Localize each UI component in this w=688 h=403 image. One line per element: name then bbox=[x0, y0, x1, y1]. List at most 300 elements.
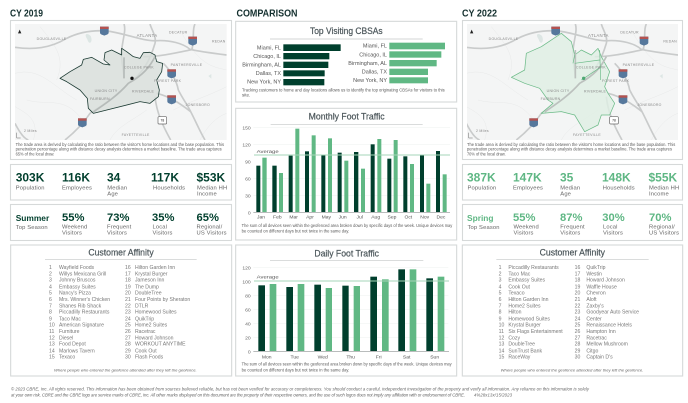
note: 2022 trade area: 70% of the local draw. bbox=[467, 151, 506, 156]
bar chart: CBSAs 2022: Miami, FL bbox=[363, 44, 387, 50]
list: affinity 1 to 30: 4 bbox=[49, 284, 52, 290]
list: affinity 1 to 30: 7 bbox=[49, 303, 52, 309]
bar chart: monthly: 90 bbox=[245, 160, 251, 166]
bar chart: daily: Average bbox=[257, 274, 279, 280]
list: affinity 1 to 30: Racetrac bbox=[586, 335, 607, 341]
panel: 2019 demographics bbox=[10, 164, 232, 200]
stat: regional visitors 65% bbox=[196, 212, 227, 236]
stat: regional visitors 70% bbox=[649, 212, 679, 236]
bar chart: CBSAs 2022: Chicago, IL bbox=[359, 52, 387, 58]
note: affinity 2019: Where people who entered the geofence attended after they left the geofence. bbox=[54, 368, 197, 373]
list: affinity 1 to 30: Nancy's Pizza bbox=[59, 291, 91, 297]
stat: median age 35 bbox=[560, 171, 580, 198]
list: affinity 1 to 30: Chevron bbox=[586, 291, 606, 297]
stat: 116K employees bbox=[62, 171, 92, 192]
panel: 2022 trade area map bbox=[462, 20, 682, 160]
map: 2022 trade area: FAIRBURN bbox=[541, 97, 561, 101]
bar chart: daily: Fri bbox=[376, 354, 382, 360]
list: affinity 1 to 30: 24 bbox=[575, 316, 581, 322]
stat: regional visitors 70%: Regional/ bbox=[649, 224, 675, 230]
list: affinity 1 to 30: Marlows Tavern bbox=[59, 348, 95, 354]
map: 2019 trade area: ATLANTA bbox=[137, 33, 157, 38]
list: affinity 1 to 30: Aloft bbox=[586, 297, 597, 303]
list: affinity 1 to 30: 21 bbox=[125, 297, 131, 303]
panel: 2022 customer affinity bbox=[462, 245, 683, 376]
list: affinity 1 to 30: 20 bbox=[125, 291, 131, 297]
list: affinity 1 to 30: Food Depot bbox=[59, 342, 86, 348]
list: affinity 1 to 30: 17 bbox=[575, 271, 581, 277]
list: affinity 1 to 30: 22 bbox=[125, 303, 131, 309]
note: 2022 trade area: The trade area is derived by calculating the ratio between the visitor's home locations and the base population. This bbox=[467, 142, 675, 147]
bar chart: monthly bbox=[242, 125, 450, 221]
footer: legal disclaimer: at your own risk. CBRE and the CBRE logo are service marks of CBRE, Inc. All other marks displayed on this document are the property of their respective owners, and the use of such logos does not imply any affiliation with or endorsement of CBRE. bbox=[11, 393, 465, 398]
map: 2019 trade area: FAIRBURN bbox=[90, 97, 110, 101]
map: 2019 trade area: DECATUR bbox=[169, 30, 188, 34]
stat: frequent visitors 87%: Frequent bbox=[560, 224, 585, 230]
map: 2019 trade area: 2 Miles bbox=[24, 129, 37, 133]
list: affinity 1 to 30: Texaco bbox=[508, 291, 525, 297]
heading: CY 2022: CY 2022 bbox=[462, 8, 497, 20]
list: affinity 1 to 30: Goodyear Auto Service bbox=[586, 310, 639, 316]
list: affinity 1 to 30: 15 bbox=[49, 355, 55, 361]
map: 2019 trade area: UNION CITY bbox=[95, 89, 118, 93]
stat: 117K households bbox=[151, 171, 185, 192]
list: affinity 1 to 30: Howard Johnson bbox=[586, 278, 625, 284]
list: affinity 1 to 30: Citgo bbox=[586, 348, 598, 354]
list: affinity 1 to 30: Mellow Mushroom bbox=[586, 342, 628, 348]
list: affinity 1 to 30: 9 bbox=[499, 316, 502, 322]
stat: 148K households: Households bbox=[603, 186, 635, 192]
list: affinity 1 to 30: Renaissance Hotels bbox=[586, 323, 632, 329]
stat: median age 35: 35 bbox=[560, 171, 574, 185]
map: 2022 trade area: FAYETTEVILLE bbox=[573, 133, 601, 137]
stat: weekend visitors 55%: Visitors bbox=[514, 230, 534, 236]
list: affinity 1 to 30: 12 bbox=[499, 335, 505, 341]
list: affinity 1 to 30: 4 bbox=[499, 284, 502, 290]
bar chart: monthly: 120 bbox=[242, 142, 251, 148]
bar chart: CBSAs 2022: Dallas, TX bbox=[362, 70, 387, 76]
panel: 2022 demographics bbox=[462, 164, 682, 200]
footer: legal disclaimer: 4%28x13x/15/2023 bbox=[474, 393, 513, 398]
stat: regional visitors 65%: 65% bbox=[196, 212, 219, 224]
stat: top season spring: Top Season bbox=[468, 225, 500, 231]
note: monthly: be counted on different days but not twice in the same day. bbox=[242, 229, 349, 234]
note: daily: The sum of all devices seen within the geofenced area broken down by specific days of the week. Unique devices may bbox=[242, 361, 453, 366]
bar chart: daily: 60 bbox=[245, 308, 251, 314]
bar chart: CBSAs 2019: Chicago, IL bbox=[253, 54, 281, 60]
note: monthly bbox=[242, 223, 453, 234]
stat: regional visitors 65%: Regional/ bbox=[196, 224, 223, 230]
stat: $53K income: $53K bbox=[196, 171, 226, 185]
list: affinity 1 to 30: Jameson Inn bbox=[135, 278, 164, 284]
list: affinity 1 to 30: Wayfield Foods bbox=[59, 265, 95, 271]
bar chart: monthly: 0 bbox=[248, 210, 251, 216]
stat: weekend visitors 55%: Visitors bbox=[62, 230, 82, 236]
stat: 303K population: 303K bbox=[16, 171, 45, 185]
map: 2019 trade area bbox=[15, 24, 227, 140]
stat: $53K income: Median HH bbox=[197, 186, 227, 192]
list: affinity 1 to 30: Howard Johnson bbox=[135, 335, 174, 341]
list: affinity 1 to 30: 14 bbox=[499, 348, 505, 354]
list: affinity 1 to 30: 13 bbox=[49, 342, 55, 348]
bar chart: monthly: Mar bbox=[289, 215, 298, 221]
stat: 387K population: 387K bbox=[467, 171, 496, 185]
stat: frequent visitors 73%: 73% bbox=[107, 212, 129, 224]
list: affinity 1 to 30: 2 bbox=[49, 271, 52, 277]
list: affinity 1 to 30: 18 bbox=[125, 278, 131, 284]
map: 2022 trade area: PANTHERSVILLE bbox=[623, 63, 655, 67]
list: affinity 1 to 30: 16 bbox=[125, 265, 131, 271]
list: affinity 1 to 30: 23 bbox=[575, 310, 581, 316]
heading: customer affinity 2022: Customer Affinity bbox=[540, 247, 605, 257]
stat: $55K income: $55K bbox=[648, 171, 678, 185]
note: CBSAs: Tracking customers to home and day locations allows us to identify the top originating CBSAs for visitors to this bbox=[242, 88, 445, 93]
bar chart: CBSAs 2022: New York, NY bbox=[353, 78, 387, 84]
list: affinity 1 to 30: Hilton Garden Inn bbox=[508, 297, 549, 303]
stat: weekend visitors 55%: Weekend bbox=[514, 224, 539, 230]
heading: daily foot traffic: Daily Foot Traffic bbox=[314, 248, 379, 258]
list: affinity 1 to 30: Flash Foods bbox=[135, 355, 164, 361]
list: affinity 1 to 30: 13 bbox=[499, 342, 505, 348]
list: affinity 1 to 30: 6 bbox=[499, 297, 502, 303]
footer: legal disclaimer: © 2023 CBRE, Inc. All rights reserved. This information has been obtained from sources believed reliable, but has not been verified for accuracy or completeness. You should conduct a careful, independent investigation of the property and verify all information. Any reliance on this information is solely bbox=[11, 387, 590, 392]
list: affinity 1 to 30: Four Points by Sheraton bbox=[135, 297, 190, 303]
stat: regional visitors 70%: 70% bbox=[649, 212, 671, 224]
list: affinity 1 to 30: 1 bbox=[49, 265, 52, 271]
note: affinity 2022: Where people who entered the geofence attended after they left the geofence. bbox=[501, 368, 643, 373]
list: affinity 1 to 30: 5 bbox=[499, 291, 502, 297]
panel: monthly foot traffic bbox=[236, 108, 457, 240]
bar chart: monthly: May bbox=[322, 215, 332, 221]
list: affinity 1 to 30: 16 bbox=[575, 265, 581, 271]
bar chart: monthly: 150 bbox=[242, 125, 251, 131]
map: 2019 trade area: JONESBORO bbox=[186, 103, 210, 107]
map: 2019 trade area: FAYETTEVILLE bbox=[122, 133, 150, 137]
note: daily bbox=[242, 361, 453, 372]
list: affinity 1 to 30: 25 bbox=[575, 323, 581, 329]
stat: local visitors 30%: Visitors bbox=[603, 230, 623, 236]
panel: 2019 trade area map bbox=[10, 20, 232, 160]
bar chart: monthly: Jan bbox=[257, 215, 265, 221]
bar chart: daily: Mon bbox=[262, 354, 272, 360]
bar chart: CBSAs 2022 bbox=[348, 43, 445, 84]
list: affinity 1 to 30: 29 bbox=[575, 348, 581, 354]
bar chart: daily: Wed bbox=[318, 354, 328, 360]
stat: $55K income: Income bbox=[649, 192, 669, 198]
stat: 116K employees: 116K bbox=[62, 171, 90, 185]
footer: legal disclaimer bbox=[11, 387, 590, 398]
note: monthly: The sum of all devices seen within the geofenced area broken down by specific days of the week. Unique devices may bbox=[242, 223, 453, 228]
bar chart: daily: Sat bbox=[403, 354, 411, 360]
map: 2022 trade area: RIVERDALE bbox=[584, 90, 607, 94]
list: affinity 1 to 30: 9 bbox=[49, 316, 52, 322]
list: affinity 1 to 30: 29 bbox=[125, 348, 131, 354]
list: affinity 1 to 30: 26 bbox=[575, 329, 581, 335]
note: 2022 trade area: penetration percentage along with distance decay analysis determines a market baseline. The trade area captures bbox=[467, 147, 672, 152]
list: affinity 1 to 30: Captain D's bbox=[586, 355, 613, 361]
list: affinity 1 to 30: 5 bbox=[49, 291, 52, 297]
list: affinity 1 to 30: Shanes Rib Shack bbox=[59, 303, 102, 309]
map: 2019 trade area: REDAN bbox=[212, 40, 226, 44]
bar chart: daily: 100 bbox=[242, 280, 251, 286]
heading: customer affinity 2019: Customer Affinity bbox=[88, 247, 154, 257]
panel: 2019 visitors bbox=[10, 204, 232, 240]
heading: CY 2019: CY 2019 bbox=[10, 8, 43, 20]
bar chart: monthly: 60 bbox=[245, 177, 251, 183]
stat: 147K employees: 147K bbox=[513, 171, 542, 185]
stat: 147K employees: Employees bbox=[513, 186, 543, 192]
bar chart: monthly: Oct bbox=[404, 215, 413, 221]
stat: weekend visitors 55% bbox=[62, 212, 87, 236]
list: affinity 1 to 30: Embassy Suites bbox=[59, 284, 96, 290]
note: 2022 trade area bbox=[467, 142, 675, 156]
bar chart: daily: 0 bbox=[248, 349, 251, 355]
stat: 148K households: 148K bbox=[602, 171, 631, 185]
heading: top visiting CBSAs: Top Visiting CBSAs bbox=[310, 26, 383, 36]
stat: 303K population: Population bbox=[16, 186, 45, 192]
panel: top visiting CBSAs bbox=[236, 21, 457, 102]
list: affinity 1 to 30: 27 bbox=[575, 335, 581, 341]
list: affinity 1 to 30: Krystal Burger bbox=[135, 271, 168, 277]
list: affinity 1 to 30: 19 bbox=[125, 284, 131, 290]
map: 2022 trade area bbox=[466, 24, 678, 140]
list: affinity 1 to 30: Racetrac bbox=[135, 329, 156, 335]
list: affinity 1 to 30: 3 bbox=[499, 278, 502, 284]
stat: top season summer: Top Season bbox=[16, 225, 48, 231]
bar chart: monthly: Jun bbox=[339, 215, 347, 221]
list: affinity 1 to 30: 30 bbox=[125, 355, 131, 361]
map: 2022 trade area: UNION CITY bbox=[547, 89, 570, 93]
stat: top season summer: Summer bbox=[16, 213, 50, 223]
bar chart: CBSAs 2019: Dallas, TX bbox=[256, 71, 281, 77]
list: affinity 1 to 30 bbox=[499, 265, 639, 361]
stat: local visitors 35% bbox=[152, 212, 174, 236]
list: affinity 1 to 30: SunTrust Bank bbox=[508, 348, 542, 354]
bar chart: daily: Sun bbox=[430, 354, 439, 360]
list: affinity 1 to 30: 27 bbox=[125, 335, 131, 341]
stat: 387K population: Population bbox=[468, 186, 496, 192]
list: affinity 1 to 30: 14 bbox=[49, 348, 55, 354]
list: affinity 1 to 30: Hilton bbox=[508, 310, 522, 316]
stat: local visitors 30%: 30% bbox=[602, 212, 625, 224]
list: affinity 1 to 30: Waffle House bbox=[586, 284, 617, 290]
list: affinity 1 to 30: 21 bbox=[575, 297, 581, 303]
map: 2019 trade area: 78 bbox=[160, 119, 164, 123]
bar chart: daily bbox=[242, 266, 449, 360]
bar chart: daily: 80 bbox=[245, 294, 251, 300]
note: 2019 trade area bbox=[16, 142, 224, 156]
bar chart: CBSAs 2019: Miami, FL bbox=[257, 45, 281, 51]
map: 2022 trade area: REDAN bbox=[663, 40, 677, 44]
stat: frequent visitors 87%: Visitors bbox=[560, 230, 580, 236]
panel: daily foot traffic bbox=[236, 245, 457, 376]
note: 2019 trade area: The trade area is derived by calculating the ratio between the visitor's home locations and the base population. This bbox=[16, 142, 224, 147]
list: affinity 1 to 30: Taco Mac bbox=[508, 271, 531, 277]
list: affinity 1 to 30 bbox=[49, 265, 190, 361]
stat: 116K employees: Employees bbox=[62, 186, 92, 192]
list: affinity 1 to 30: 23 bbox=[125, 310, 131, 316]
stat: top season spring bbox=[467, 213, 500, 231]
stat: local visitors 35%: 35% bbox=[152, 212, 174, 224]
bar chart: monthly: Average bbox=[257, 149, 279, 155]
heading: comparison: COMPARISON bbox=[236, 8, 298, 20]
list: affinity 1 to 30: 10 bbox=[499, 323, 505, 329]
bar chart: daily: Thu bbox=[346, 354, 355, 360]
list: affinity 1 to 30: 3 bbox=[49, 278, 52, 284]
bar chart: daily: 20 bbox=[245, 336, 251, 342]
list: affinity 1 to 30: DoubleTree bbox=[508, 342, 535, 348]
list: affinity 1 to 30: Center bbox=[586, 316, 602, 322]
list: affinity 1 to 30: Johnny Bruscos bbox=[59, 278, 96, 284]
stat: median age 35: Age bbox=[560, 192, 571, 198]
list: affinity 1 to 30: Zaxby's bbox=[586, 303, 604, 309]
note: 2019 trade area: 65% of the local draw. bbox=[16, 151, 54, 156]
bar chart: monthly: Nov bbox=[420, 215, 430, 221]
list: affinity 1 to 30: 30 bbox=[575, 355, 581, 361]
map: 2019 trade area: PANTHERSVILLE bbox=[171, 63, 203, 67]
stat: $55K income: Median HH bbox=[649, 186, 679, 192]
stat: median age 34 bbox=[107, 171, 127, 198]
stat: top season spring: Spring bbox=[467, 213, 494, 223]
bar chart: daily: 120 bbox=[242, 266, 251, 272]
list: affinity 1 to 30: 10 bbox=[49, 323, 55, 329]
stat: 303K population bbox=[16, 171, 45, 192]
list: affinity 1 to 30: 28 bbox=[125, 342, 131, 348]
stat: 117K households: Households bbox=[153, 186, 185, 192]
list: affinity 1 to 30: Homewood Suites bbox=[508, 316, 550, 322]
stat: weekend visitors 55%: Weekend bbox=[62, 224, 87, 230]
list: affinity 1 to 30: Six Flags Entertainment bbox=[508, 329, 563, 335]
list: affinity 1 to 30: Willys Mexicana Grill bbox=[59, 271, 106, 277]
stat: top season summer bbox=[16, 213, 50, 231]
list: affinity 1 to 30: 8 bbox=[499, 310, 502, 316]
list: affinity 1 to 30: 24 bbox=[125, 316, 131, 322]
note: 2019 trade area: penetration percentage along with distance decay analysis determines a market baseline. The trade area captures bbox=[16, 147, 222, 152]
bar chart: monthly: Sep bbox=[388, 215, 397, 221]
stat: frequent visitors 73% bbox=[107, 212, 132, 236]
list: affinity 1 to 30: Cook Out bbox=[508, 284, 531, 290]
map: 2019 trade area: COLLEGE PARK bbox=[124, 66, 154, 70]
list: affinity 1 to 30: 6 bbox=[49, 297, 52, 303]
bar chart: CBSAs 2022: Birmingham, AL bbox=[348, 61, 387, 67]
stat: 148K households bbox=[602, 171, 635, 192]
list: affinity 1 to 30: Piccadilly Restaurants bbox=[59, 310, 110, 316]
list: affinity 1 to 30: RaceWay bbox=[508, 355, 531, 361]
bar chart: monthly: Apr bbox=[306, 215, 314, 221]
list: affinity 1 to 30: Hilton Garden Inn bbox=[135, 265, 175, 271]
list: affinity 1 to 30: 2 bbox=[499, 271, 502, 277]
list: affinity 1 to 30: Texaco bbox=[59, 355, 75, 361]
stat: regional visitors 65%: US Visitors bbox=[196, 230, 227, 236]
list: affinity 1 to 30: Furniture bbox=[59, 329, 80, 335]
bar chart: monthly: 30 bbox=[245, 194, 251, 200]
bar chart: monthly: Dec bbox=[437, 215, 446, 221]
stat: frequent visitors 73%: Frequent bbox=[107, 224, 132, 230]
list: affinity 1 to 30: 1 bbox=[499, 265, 502, 271]
list: affinity 1 to 30: 15 bbox=[499, 355, 505, 361]
list: affinity 1 to 30: Home2 Suites bbox=[508, 303, 541, 309]
stat: median age 34: Age bbox=[107, 192, 118, 198]
list: affinity 1 to 30: Krystal Burger bbox=[508, 323, 541, 329]
list: affinity 1 to 30: 26 bbox=[125, 329, 131, 335]
panel: 2019 customer affinity bbox=[11, 245, 232, 376]
stat: weekend visitors 55%: 55% bbox=[62, 212, 84, 224]
bar chart: monthly: Jul bbox=[356, 215, 363, 221]
list: affinity 1 to 30: 11 bbox=[49, 329, 54, 335]
list: affinity 1 to 30: 7 bbox=[499, 303, 502, 309]
list: affinity 1 to 30: 18 bbox=[575, 278, 581, 284]
list: affinity 1 to 30: Mrs. Winner's Chicken bbox=[59, 297, 110, 303]
stat: $53K income bbox=[196, 171, 227, 198]
stat: 387K population bbox=[467, 171, 496, 192]
list: affinity 1 to 30: Cozy bbox=[508, 335, 520, 341]
bar chart: CBSAs 2019 bbox=[242, 44, 341, 86]
stat: frequent visitors 87% bbox=[560, 212, 585, 236]
stat: frequent visitors 73%: Visitors bbox=[107, 230, 127, 236]
list: affinity 1 to 30: Piccadilly Restaurants bbox=[508, 265, 559, 271]
map: 2022 trade area: 78 bbox=[612, 119, 616, 123]
list: affinity 1 to 30: Home2 Suites bbox=[135, 323, 168, 329]
list: affinity 1 to 30: Westin bbox=[586, 271, 602, 277]
list: affinity 1 to 30: Cook Out bbox=[135, 348, 157, 354]
stat: median age 34: 34 bbox=[107, 171, 121, 185]
map: 2019 trade area: DOUGLASVILLE bbox=[37, 37, 67, 41]
list: affinity 1 to 30: QuikTrip bbox=[135, 316, 154, 322]
stat: frequent visitors 87%: 87% bbox=[560, 212, 582, 224]
stat: regional visitors 70%: US Visitors bbox=[649, 230, 679, 236]
list: affinity 1 to 30: American Signature bbox=[59, 323, 104, 329]
list: affinity 1 to 30: 17 bbox=[125, 271, 131, 277]
map: 2022 trade area: COLLEGE PARK bbox=[576, 66, 606, 70]
map: 2019 trade area: FOREST PARK bbox=[154, 79, 182, 83]
list: affinity 1 to 30: 20 bbox=[575, 291, 581, 297]
list: affinity 1 to 30: Homewood Suites bbox=[135, 310, 177, 316]
map: 2022 trade area: 2 Miles bbox=[476, 129, 489, 133]
map: 2022 trade area: ATLANTA bbox=[588, 33, 609, 38]
list: affinity 1 to 30: Taco Mac bbox=[59, 316, 81, 322]
list: affinity 1 to 30: 11 bbox=[499, 329, 504, 335]
list: affinity 1 to 30: Embassy Suites bbox=[508, 278, 546, 284]
map: 2022 trade area: JONESBORO bbox=[637, 103, 662, 107]
list: affinity 1 to 30: 12 bbox=[49, 335, 55, 341]
stat: 117K households: 117K bbox=[151, 171, 179, 185]
list: affinity 1 to 30: Hampton Inn bbox=[586, 329, 616, 335]
note: daily: be counted on different days but not twice in the same day. bbox=[242, 367, 349, 372]
stat: weekend visitors 55% bbox=[513, 212, 539, 236]
heading: monthly foot traffic: Monthly Foot Traffic bbox=[309, 111, 385, 121]
list: affinity 1 to 30: The Dump bbox=[135, 284, 159, 290]
list: affinity 1 to 30: Diesel bbox=[59, 335, 73, 341]
stat: local visitors 30% bbox=[602, 212, 625, 236]
stat: $53K income: Income bbox=[197, 192, 217, 198]
bar chart: daily: Tue bbox=[290, 354, 299, 360]
bar chart: monthly: Aug bbox=[371, 215, 380, 221]
bar chart: daily: 40 bbox=[245, 322, 251, 328]
stat: weekend visitors 55%: 55% bbox=[513, 212, 535, 224]
stat: local visitors 35%: Visitors bbox=[152, 230, 173, 236]
map: 2019 trade area: RIVERDALE bbox=[132, 90, 155, 94]
map: 2022 trade area: DOUGLASVILLE bbox=[489, 37, 519, 41]
bar chart: monthly: Feb bbox=[273, 215, 282, 221]
bar chart: CBSAs 2019: New York, NY bbox=[247, 80, 281, 86]
list: affinity 1 to 30: DoubleTree bbox=[135, 291, 162, 297]
stat: 147K employees bbox=[513, 171, 543, 192]
stat: $55K income bbox=[648, 171, 679, 198]
list: affinity 1 to 30: DTLR bbox=[135, 303, 149, 309]
map: 2022 trade area: FOREST PARK bbox=[602, 79, 630, 83]
list: affinity 1 to 30: 28 bbox=[575, 342, 581, 348]
stat: local visitors 30%: Local bbox=[603, 224, 618, 230]
